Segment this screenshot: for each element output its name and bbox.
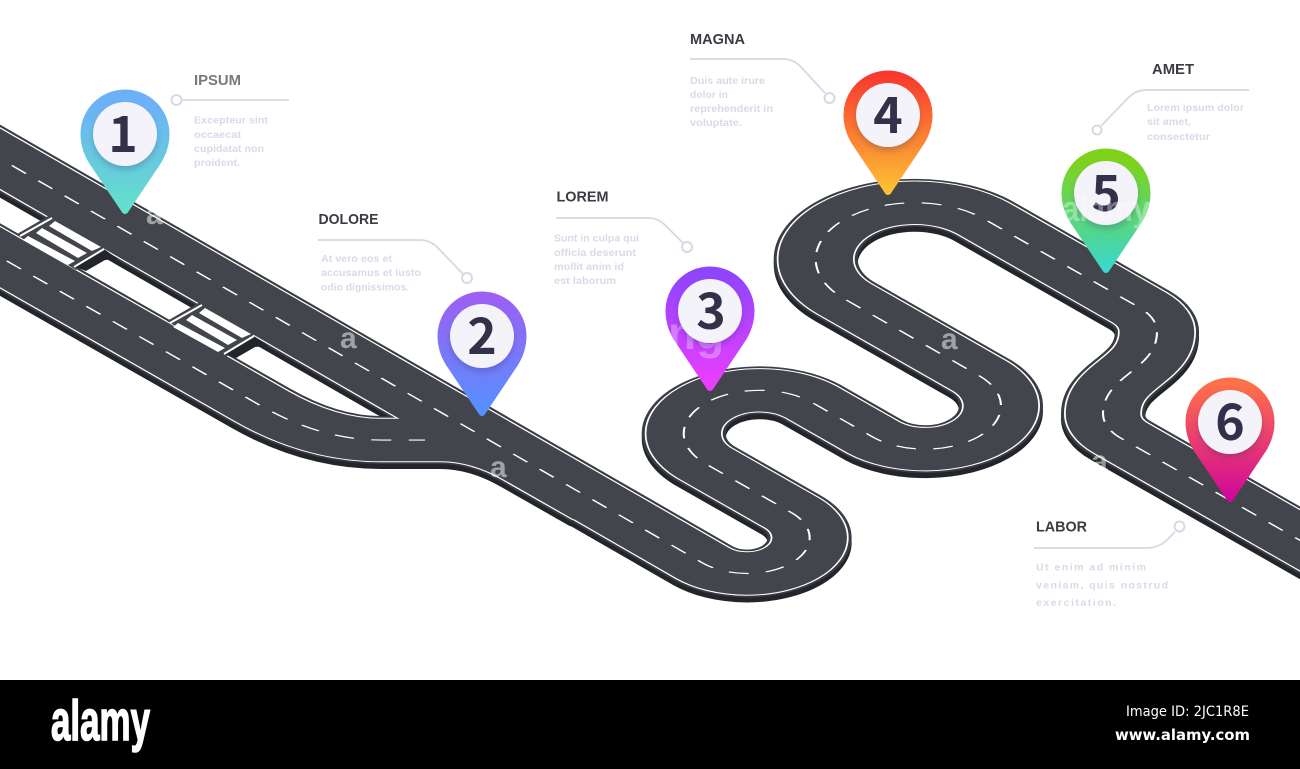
watermark on road: a [340, 322, 357, 355]
pin 4: 4 [873, 76, 903, 148]
callout: amet: sit amet, [1147, 116, 1191, 128]
watermark on road: a [490, 451, 507, 484]
pin 3: ng [668, 307, 724, 359]
pin 1: 1 [108, 95, 138, 167]
callout: magna: voluptate. [690, 117, 742, 129]
website: www.alamy.com [1115, 726, 1250, 744]
callout: lorem: est laborum [554, 275, 616, 287]
callout: labor: LABOR [1036, 519, 1087, 536]
callout: ipsum: proident. [194, 157, 240, 169]
callout: lorem: officia deserunt [554, 247, 637, 259]
callout: dolore [318, 211, 472, 294]
footer logo: alamy [51, 689, 150, 753]
pin 6 [1186, 378, 1274, 502]
crosswalk connector 2 [167, 302, 268, 358]
callout: amet: Lorem ipsum dolor [1147, 102, 1244, 114]
callout: lorem: LOREM [556, 189, 608, 206]
pin 4 [844, 70, 932, 195]
road edge shadow [0, 146, 1300, 579]
callout: ipsum: occaecat [194, 129, 242, 141]
pin 5: 5 [1091, 154, 1121, 226]
pin 5: alamy [1062, 188, 1150, 229]
callout: amet: AMET [1152, 61, 1194, 78]
crosswalk connector 1 [17, 215, 118, 271]
callout: ipsum: Excepteur sint [194, 114, 269, 126]
callout: labor: exercitation. [1036, 597, 1116, 609]
road [0, 141, 1300, 579]
footer bar [0, 680, 1300, 769]
callout: ipsum [172, 72, 289, 169]
pin 2 [438, 292, 526, 416]
callout: labor: veniam, quis nostrud [1036, 580, 1168, 592]
callout: labor [1034, 519, 1184, 609]
callout: dolore: At vero eos et [321, 253, 393, 265]
callout: ipsum: cupidatat non [194, 143, 264, 155]
callout: dolore: accusamus et iusto [321, 267, 421, 279]
pin 1 [80, 90, 170, 214]
callout: amet [1092, 61, 1249, 143]
watermark on road [146, 198, 1108, 484]
pin 5 [1062, 148, 1150, 273]
centre dashes [0, 141, 1300, 574]
pin 3 [666, 266, 754, 391]
callout: labor: Ut enim ad minim [1036, 562, 1146, 574]
image id: Image ID: 2JC1R8E [1126, 704, 1249, 720]
road surface and edge lines [0, 141, 1300, 574]
watermark on road: a [941, 323, 958, 356]
callout: lorem [554, 189, 692, 287]
watermark on road: a [146, 198, 163, 231]
pin 2: 2 [467, 297, 497, 369]
callout: ipsum: IPSUM [194, 72, 241, 89]
callout: magna: dolor in [690, 89, 728, 101]
callout: amet: consectetur [1147, 131, 1210, 143]
callout: magna: reprehenderit in [690, 103, 773, 115]
pin 3: 3 [696, 272, 726, 344]
callout: magna: MAGNA [690, 31, 745, 48]
callout: lorem: mollit anim id [554, 261, 624, 273]
pin 6: 6 [1215, 383, 1245, 455]
callout: dolore: odio dignissimos. [321, 282, 409, 294]
callout: lorem: Sunt in culpa qui [554, 233, 639, 245]
callout: magna [690, 31, 834, 129]
callout: magna: Duis aute irure [690, 75, 765, 87]
callout: dolore: DOLORE [318, 211, 378, 228]
watermark on road: a [1091, 445, 1108, 478]
